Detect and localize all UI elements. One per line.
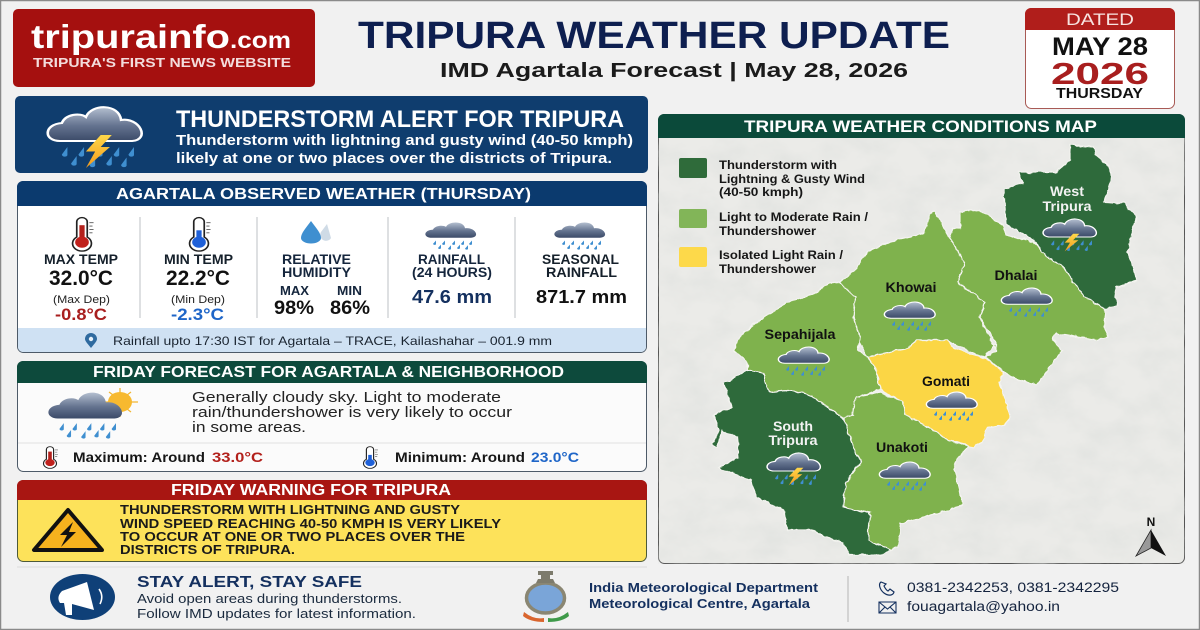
district: West Tripura: Tripura [1042,199,1092,214]
stat: max temp: 32.0°C [49,267,113,290]
stat: rainfall 24 hours: RAINFALL [418,252,485,267]
stat: max temp: -0.8°C [55,305,107,324]
panel: thunderstorm alert: likely at one or two places over the districts of Tripura. [176,151,612,167]
stat: max temp [44,218,118,324]
panel: Friday warning: FRIDAY WARNING FOR TRIPURA [171,482,451,499]
stat: relative humidity: 98% [274,298,314,319]
forecast minimum: 23.0°C [531,450,579,465]
district: South Tripura: South [773,419,813,434]
panel: thunderstorm alert: Thunderstorm with lightning and gusty wind (40-50 kmph) [176,133,633,149]
rainfall note strip: Rainfall upto 17:30 IST for Agartala – TRACE, Kailashahar – 001.9 mm [113,334,552,348]
stat: relative humidity: RELATIVE [282,252,351,267]
legend: thunderstorm: (40-50 kmph) [719,185,803,199]
legend: isolated light rain: Isolated Light Rain / [719,248,844,262]
district: Unakoti [843,392,968,550]
north arrow: N [1147,515,1155,529]
stat: seasonal rainfall: RAINFALL [546,265,617,280]
logo: tripurainfo.com: TRIPURA'S FIRST NEWS WEBSITE [33,56,291,70]
stat: min temp: (Min Dep) [171,294,225,306]
district: Sepahijala: Sepahijala [764,327,836,342]
icon: warning triangle [34,510,102,550]
panel: Friday forecast [17,361,647,472]
date card: DATED [1066,11,1134,29]
forecast minimum: Minimum: Around [395,450,525,465]
stat: max temp: (Max Dep) [53,294,110,306]
forecast minimum [364,447,579,468]
stat: seasonal rainfall: 871.7 mm [536,287,627,307]
legend: thunderstorm [679,158,865,199]
logo: tripurainfo.com: tripurainfo [31,18,230,55]
footer: IMD name: India Meteorological Department [589,580,819,595]
stat: min temp: 22.2°C [166,267,230,290]
legend: thunderstorm: Thunderstorm with [719,158,837,172]
stat: relative humidity: HUMIDITY [282,265,351,280]
panel: Friday warning: THUNDERSTORM WITH LIGHTNING AND GUSTY [120,502,460,517]
panel: Friday forecast: FRIDAY FORECAST FOR AGARTALA & NEIGHBORHOOD [93,364,564,381]
panel: Friday warning [17,480,647,562]
stat: relative humidity [274,221,370,319]
panel: Friday forecast: Generally cloudy sky. Light to moderate [192,390,501,406]
footer: IMD name: Meteorological Centre, Agartala [589,596,811,611]
stat: relative humidity: MAX [280,284,310,298]
district: West Tripura: West [1050,184,1085,199]
footer: safety message [50,574,416,621]
footer: safety message: Avoid open areas during thunderstorms. [137,592,402,606]
district: Gomati: Gomati [922,374,970,389]
date card: MAY 28 [1052,33,1148,61]
district: West Tripura [1004,145,1137,309]
district: South Tripura: Tripura [768,433,818,448]
forecast maximum: 33.0°C [212,450,263,465]
footer: IMD name [589,580,819,611]
footer divider [17,566,647,568]
stat: rainfall 24 hours: 47.6 mm [412,287,492,307]
stat: min temp [164,218,233,324]
district: South Tripura [712,370,891,555]
district: Dhalai [949,210,1108,385]
panel: thunderstorm alert: THUNDERSTORM ALERT FOR TRIPURA [176,106,624,133]
north arrow [1136,515,1166,556]
forecast maximum [44,447,263,468]
district: Gomati [868,340,1011,447]
district: Dhalai: Dhalai [994,268,1038,283]
date card: 2026 [1051,56,1149,91]
stat: max temp: MAX TEMP [44,252,118,267]
panel: Friday forecast: rain/thundershower is very likely to occur [192,405,512,421]
district: Khowai: Khowai [886,280,936,295]
district: Sepahijala [734,282,880,418]
rainfall note strip [18,328,646,352]
panel: Agartala observed weather: AGARTALA OBSERVED WEATHER (THURSDAY) [116,186,531,203]
icon: water drops [301,221,331,244]
legend: thunderstorm: Lightning & Gusty Wind [719,172,865,186]
footer: safety message: Follow IMD updates for latest information. [137,607,416,621]
legend: light to moderate rain: Thundershower [719,224,816,238]
legend: isolated light rain [679,247,844,276]
icon: storm cloud [48,107,142,168]
panel: weather map: TRIPURA WEATHER CONDITIONS MAP [744,117,1097,136]
panel: thunderstorm alert [15,96,648,173]
logo: tripurainfo.com [13,9,315,87]
district: Unakoti: Unakoti [876,440,928,455]
district: Khowai [839,212,996,357]
panel: Agartala observed weather [17,181,647,352]
date card [1025,8,1175,108]
district map [712,145,1137,555]
date card: THURSDAY [1056,86,1143,102]
panel: Friday warning: DISTRICTS OF TRIPURA. [120,542,295,557]
subtitle: IMD Agartala Forecast | May 28, 2026 [440,60,908,82]
panel: weather map [658,114,1185,564]
panel: Friday warning: WIND SPEED REACHING 40-50 KMPH IS VERY LIKELY [120,516,501,531]
stat: min temp: MIN TEMP [164,252,233,267]
stat: rainfall 24 hours [412,222,492,307]
panel: Friday forecast: in some areas. [192,420,306,436]
footer: safety message: STAY ALERT, STAY SAFE [137,574,362,591]
stat: seasonal rainfall [536,222,627,307]
icon: sun and rain cloud [48,388,138,439]
logo: tripurainfo.com: .com [230,27,291,53]
footer: email contact: fouagartala@yahoo.in [907,599,1060,614]
panel: Friday warning: TO OCCUR AT ONE OR TWO PLACES OVER THE [120,529,465,544]
legend: isolated light rain: Thundershower [719,262,816,276]
legend: light to moderate rain: Light to Moderate Rain / [719,210,869,224]
stat: min temp: -2.3°C [171,305,224,324]
footer: phone contact: 0381-2342253, 0381-2342295 [907,580,1119,595]
stat: relative humidity: MIN [337,284,362,298]
title: TRIPURA WEATHER UPDATE [358,15,950,57]
legend [679,158,869,276]
stat: rainfall 24 hours: (24 HOURS) [412,265,492,280]
stat: relative humidity: 86% [330,298,370,319]
forecast maximum: Maximum: Around [73,450,205,465]
icon: IMD emblem [523,571,569,622]
stat: seasonal rainfall: SEASONAL [542,252,619,267]
icon: megaphone [50,574,115,620]
legend: light to moderate rain [679,209,869,238]
